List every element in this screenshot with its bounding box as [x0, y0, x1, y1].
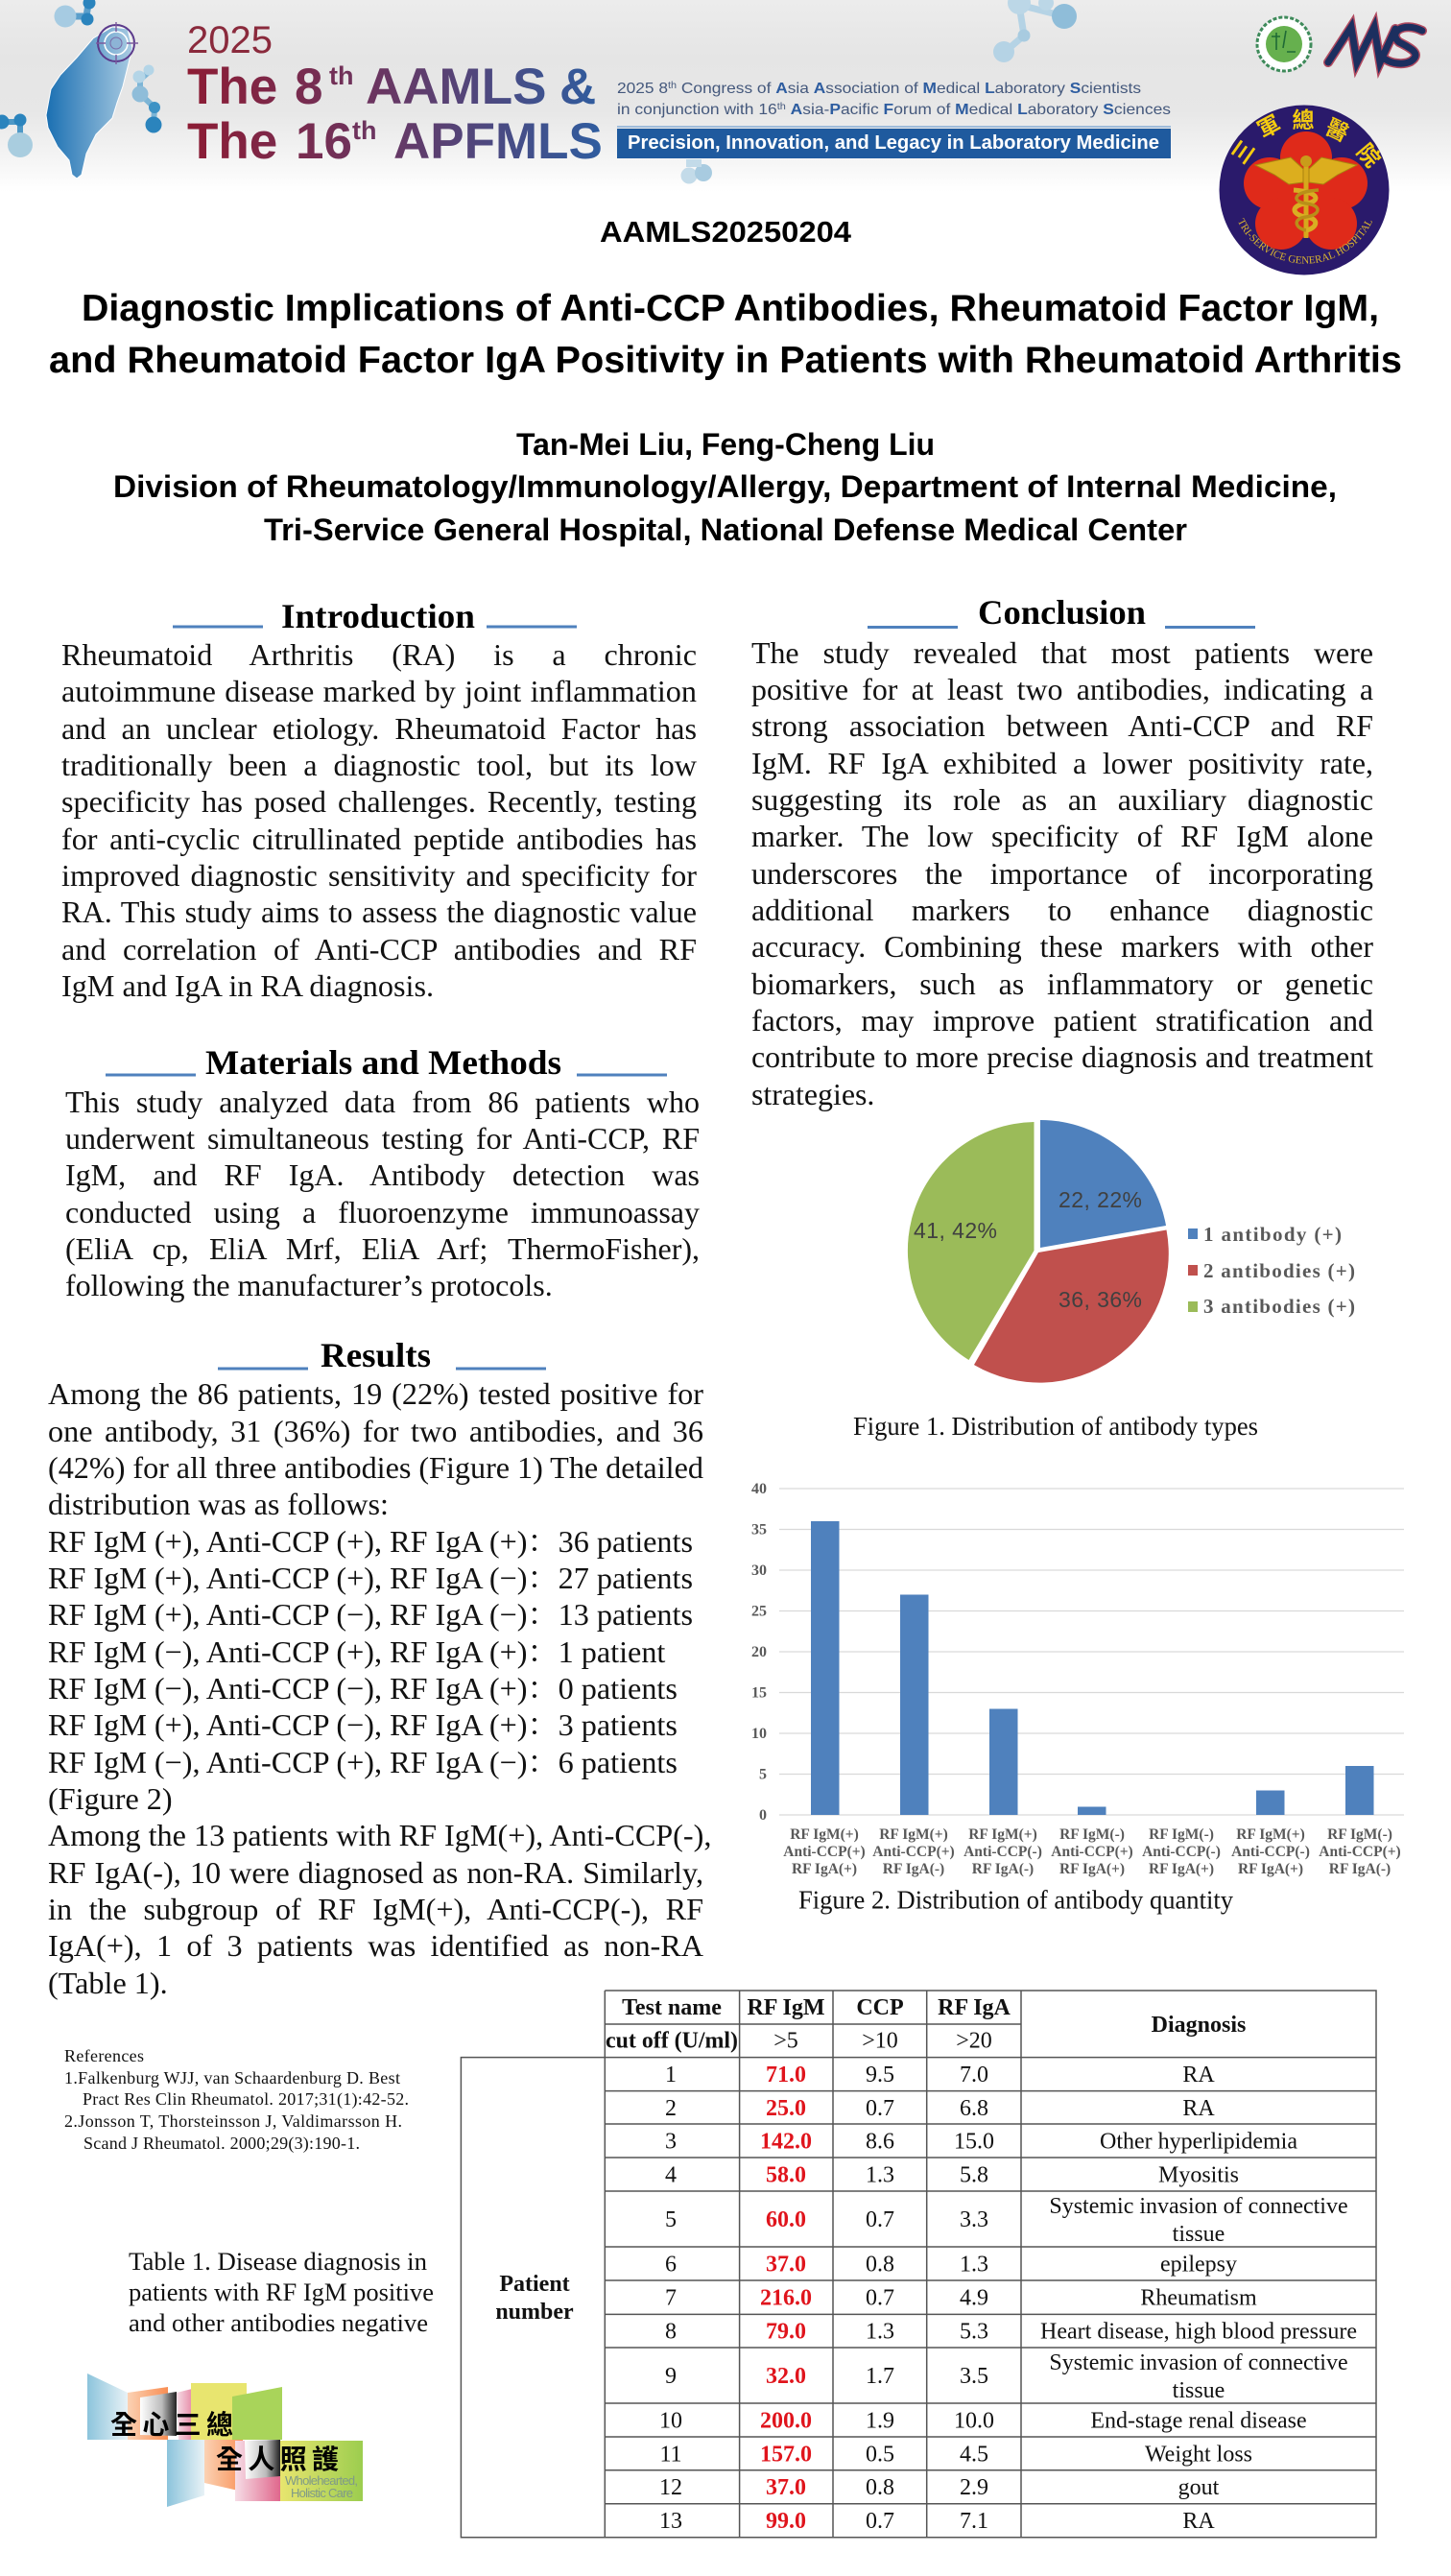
- row: patient 13: RA: [1182, 2509, 1215, 2534]
- conference name: [187, 59, 603, 170]
- category labels: Anti-CCP(+): [1051, 1844, 1133, 1860]
- row: patient 3: 142.0: [760, 2129, 812, 2154]
- text block: introduction: Rheumatoid Arthritis (RA) is a chronic: [61, 637, 697, 672]
- table header: [606, 1995, 1246, 2054]
- text block: materials and methods: conducted using a fluoroenzyme immunoassay: [65, 1195, 700, 1229]
- text block: materials and methods: underwent simultaneous testing for Anti-CCP, RF: [65, 1121, 700, 1156]
- icon: molecule left edge: [0, 113, 33, 157]
- row: patient 8: 8: [665, 2320, 677, 2345]
- caduceus: [1255, 155, 1357, 238]
- logo text: 全心三總: [110, 2410, 233, 2440]
- heading: Results: [218, 1336, 546, 1374]
- table header: cut off (U/ml): [606, 2029, 738, 2054]
- row: patient 3: 3: [665, 2129, 677, 2154]
- congress subtitle: th: [777, 102, 786, 112]
- table header: >10: [862, 2029, 898, 2054]
- row: patient 5: 3.3: [960, 2207, 988, 2232]
- row: patient 5: 5: [665, 2207, 677, 2232]
- hospital name in Chinese: [1226, 107, 1385, 172]
- row: patient 2: RA: [1182, 2096, 1215, 2121]
- table header: Diagnosis: [1152, 2013, 1246, 2038]
- congress subtitle: Congress of: [677, 81, 775, 97]
- row: patient 2: 25.0: [766, 2096, 806, 2121]
- congress subtitle: 2025 8: [617, 81, 664, 97]
- slogan bar: [617, 126, 1171, 158]
- text block: results: [48, 1376, 711, 2000]
- row: patient 11: [659, 2442, 1252, 2467]
- slice: 3 antibodies: [908, 1122, 1035, 1360]
- category labels: RF IgM(-): [1149, 1826, 1214, 1843]
- logo: wholehearted holistic care: Wholehearted,: [285, 2473, 358, 2488]
- icon: molecule top left: [54, 0, 96, 27]
- row: patient 2: 2: [665, 2096, 677, 2121]
- slice: 1 antibody: [1040, 1120, 1166, 1248]
- row: patient 4: 58.0: [766, 2163, 806, 2188]
- congress subtitle: th: [668, 81, 677, 91]
- table header: CCP: [856, 1995, 904, 2020]
- row: patient 4: Myositis: [1158, 2163, 1239, 2188]
- category labels: RF IgA(+): [1238, 1861, 1303, 1877]
- row: patient 10: [659, 2409, 1307, 2434]
- row: patient 10: 200.0: [760, 2409, 812, 2434]
- text block: introduction: and correlation of Anti-CCP antibodies and RF: [61, 932, 697, 966]
- text block: conclusion: underscores the importance of incorporating: [751, 857, 1373, 891]
- row: patient 6: 0.8: [866, 2252, 894, 2277]
- row: patient 8: [665, 2320, 1357, 2345]
- text block: conclusion: suggesting its role as an auxiliary diagnostic: [751, 783, 1373, 817]
- pie legend: 3 antibodies (+): [1203, 1295, 1355, 1318]
- category labels: Anti-CCP(+): [872, 1844, 955, 1860]
- row: patient 1: 7.0: [960, 2063, 988, 2087]
- grid lines and axis values: 0: [759, 1807, 767, 1824]
- bars: [811, 1521, 1374, 1815]
- row: patient 13: 13: [659, 2509, 682, 2534]
- text block: materials and methods: following the manufacturer’s protocols.: [65, 1268, 553, 1302]
- row: patient 13: [659, 2509, 1215, 2534]
- text block: conclusion: factors, may improve patient stratification and: [751, 1004, 1373, 1038]
- text block: introduction: improved diagnostic sensitivity and specificity for: [61, 858, 697, 893]
- row: patient 9: [665, 2350, 1348, 2403]
- hospital name in Chinese: 總: [1292, 107, 1315, 132]
- row: patient 2: 0.7: [866, 2096, 894, 2121]
- text block: results: RF IgM (+), Anti-CCP (−), RF IgA (−)：13 patients: [48, 1597, 693, 1632]
- row: patient 4: 5.8: [960, 2163, 988, 2188]
- heading: Introduction: [173, 597, 577, 635]
- text block: results: RF IgM (+), Anti-CCP (+), RF IgA (+)：36 patients: [48, 1524, 693, 1559]
- grid lines and axis values: 15: [751, 1685, 767, 1701]
- category labels: RF IgM(-): [1327, 1826, 1392, 1843]
- references: [64, 2046, 409, 2154]
- row: patient 3: 8.6: [866, 2129, 894, 2154]
- row: patient 9: tissue: [1173, 2378, 1225, 2403]
- slogan bar: Precision, Innovation, and Legacy in Laboratory Medicine: [628, 132, 1159, 154]
- text block: introduction: and an unclear etiology. Rheumatoid Factor has: [61, 711, 697, 746]
- row: patient 1: 9.5: [866, 2063, 894, 2087]
- category labels: RF IgA(-): [883, 1861, 944, 1877]
- logo: Tri-Service General Hospital: [1219, 106, 1390, 274]
- row: patient 9: 9: [665, 2364, 677, 2389]
- text block: introduction: IgM and IgA in RA diagnosis.: [61, 968, 434, 1003]
- category labels: [783, 1826, 1401, 1877]
- category labels: RF IgM(+): [968, 1826, 1037, 1843]
- caption: table 1: patients with RF IgM positive: [129, 2278, 434, 2306]
- row: patient 10: 10.0: [954, 2409, 994, 2434]
- row: patient 7: 216.0: [760, 2286, 812, 2311]
- logo: green association seal: [1257, 17, 1311, 71]
- text block: results: RF IgM (−), Anti-CCP (−), RF IgA (+)：0 patients: [48, 1671, 678, 1705]
- row label: patient number: Patient: [499, 2272, 570, 2297]
- conference name: The: [187, 59, 277, 115]
- row: patient 8: 79.0: [766, 2320, 806, 2345]
- text block: conclusion: IgM. RF IgA exhibited a lower positivity rate,: [751, 747, 1373, 780]
- references: Pract Res Clin Rheumatol. 2017;31(1):42-52.: [83, 2089, 409, 2110]
- conference name: th: [352, 116, 376, 145]
- references: Scand J Rheumatol. 2000;29(3):190-1.: [83, 2134, 360, 2154]
- row: patient 5: [665, 2194, 1348, 2247]
- conference name: AAMLS: [366, 59, 546, 115]
- heading: Materials and Methods: Materials and Methods: [205, 1043, 561, 1082]
- category labels: RF IgM(+): [1236, 1826, 1305, 1843]
- hospital name in English: TRI-SERVICE GENERAL HOSPITAL: [1238, 218, 1372, 264]
- heading: Results: Results: [321, 1336, 431, 1374]
- references: 1.Falkenburg WJJ, van Schaardenburg D. Best: [64, 2068, 400, 2087]
- row: patient 12: [659, 2475, 1220, 2500]
- category labels: RF IgA(-): [1329, 1861, 1391, 1877]
- text block: conclusion: biomarkers, such as inflammatory or genetic: [751, 967, 1373, 1001]
- grid lines and axis values: [751, 1481, 1404, 1824]
- grid lines and axis values: 40: [751, 1481, 767, 1497]
- heading: Conclusion: [868, 593, 1255, 632]
- authors and affiliation: Division of Rheumatology/Immunology/Allergy, Department of Internal Medicine,: [113, 469, 1337, 504]
- pie legend: 2 antibodies (+): [1203, 1259, 1355, 1282]
- row: patient 7: [665, 2286, 1257, 2311]
- row: patient 4: [665, 2163, 1239, 2188]
- row: patient 9: 32.0: [766, 2364, 806, 2389]
- table grid: [461, 1991, 1376, 2538]
- logo: wholehearted holistic care: Holistic Care: [291, 2486, 353, 2500]
- congress subtitle: Asia Association of Medical Laboratory Scientists: [775, 81, 1136, 97]
- caption: table 1: Table 1. Disease diagnosis in: [129, 2248, 427, 2276]
- row: patient 1: 71.0: [766, 2063, 806, 2087]
- caption: figure 1: Figure 1. Distribution of antibody types: [853, 1412, 1258, 1441]
- row: patient 12: gout: [1178, 2475, 1220, 2500]
- row: patient 8: Heart disease, high blood pressure: [1040, 2320, 1357, 2345]
- caption: figure 2: Figure 2. Distribution of antibody quantity: [798, 1885, 1233, 1914]
- category labels: Anti-CCP(+): [1319, 1844, 1401, 1860]
- text block: results: in the subgroup of RF IgM(+), Anti-CCP(-), RF: [48, 1892, 703, 1926]
- row: patient 12: 37.0: [766, 2475, 806, 2500]
- row: patient 12: 2.9: [960, 2475, 988, 2500]
- row: patient 12: 12: [659, 2475, 682, 2500]
- category labels: RF IgA(+): [792, 1861, 857, 1877]
- row: patient 7: 0.7: [866, 2286, 894, 2311]
- row: patient 1: 1: [665, 2063, 677, 2087]
- row: patient 11: 157.0: [760, 2442, 812, 2467]
- category labels: RF IgA(+): [1059, 1861, 1125, 1877]
- row: patient 13: 99.0: [766, 2509, 806, 2534]
- logo: association monogram: [1328, 27, 1422, 63]
- icon: molecule centre top: [993, 0, 1077, 62]
- row: patient 7: 7: [665, 2286, 677, 2311]
- text block: conclusion: strategies.: [751, 1078, 874, 1111]
- logo: wholehearted holistic care: [87, 2373, 363, 2507]
- category labels: Anti-CCP(-): [1231, 1844, 1310, 1860]
- row: patient 9: 1.7: [866, 2364, 894, 2389]
- congress subtitle: Asia-Pacific Forum of Medical Laboratory Sciences: [791, 102, 1166, 118]
- row: patient 12: 0.8: [866, 2475, 894, 2500]
- row: patient 6: 37.0: [766, 2252, 806, 2277]
- text block: conclusion: marker. The low specificity of RF IgM alone: [751, 820, 1373, 853]
- row: patient 11: 11: [659, 2442, 682, 2467]
- logo panels: [87, 2373, 363, 2507]
- hospital name in Chinese: 醫: [1321, 114, 1352, 146]
- icon: Taiwan map: [46, 27, 132, 179]
- text block: introduction: RA. This study aims to assess the diagnostic value: [61, 894, 697, 929]
- slice: 2 antibodies: [974, 1230, 1169, 1383]
- row: patient 4: 1.3: [866, 2163, 894, 2188]
- text block: introduction: specificity has posed challenges. Recently, testing: [61, 784, 697, 819]
- row: patient 6: epilepsy: [1160, 2252, 1237, 2277]
- logo text: [110, 2410, 339, 2474]
- text block: results: (Table 1).: [48, 1966, 168, 2000]
- text block: results: RF IgA(-), 10 were diagnosed as non-RA. Similarly,: [48, 1855, 703, 1890]
- title: and Rheumatoid Factor IgA Positivity in Patients with Rheumatoid Arthritis: [49, 340, 1402, 381]
- text block: results: RF IgM (+), Anti-CCP (+), RF IgA (−)：27 patients: [48, 1561, 693, 1595]
- icon: molecule right of map: [132, 65, 161, 132]
- row label: patient number: number: [495, 2300, 574, 2325]
- conference banner: [0, 0, 1451, 192]
- text block: conclusion: additional markers to enhance diagnostic: [751, 894, 1373, 927]
- row: patient 13: 7.1: [960, 2509, 988, 2534]
- category labels: RF IgA(-): [972, 1861, 1034, 1877]
- table header: >5: [773, 2029, 798, 2054]
- text block: results: RF IgM (+), Anti-CCP (−), RF IgA (+)：3 patients: [48, 1707, 678, 1742]
- grid lines and axis values: 30: [751, 1562, 767, 1579]
- text block: conclusion: accuracy. Combining these markers with other: [751, 930, 1373, 964]
- row: patient 7: 4.9: [960, 2286, 988, 2311]
- title: Diagnostic Implications of Anti-CCP Antibodies, Rheumatoid Factor IgM,: [82, 288, 1379, 329]
- conference name: 16: [296, 113, 352, 170]
- text block: results: (Figure 2): [48, 1781, 173, 1816]
- plum blossom: [1244, 131, 1368, 250]
- authors and affiliation: Tri-Service General Hospital, National Defense Medical Center: [264, 513, 1187, 547]
- row: patient 10: 10: [659, 2409, 682, 2434]
- row: patient 9: 3.5: [960, 2364, 988, 2389]
- text block: conclusion: strong association between Anti-CCP and RF: [751, 709, 1373, 743]
- table header: RF IgA: [938, 1995, 1011, 2020]
- row: patient 13: 0.7: [866, 2509, 894, 2534]
- category labels: RF IgA(+): [1149, 1861, 1214, 1877]
- abstract number: AAMLS20250204: [600, 215, 852, 249]
- row label: patient number: [495, 2272, 574, 2325]
- pie chart: distribution of antibody types: [908, 1120, 1355, 1383]
- authors and affiliation: Tan-Mei Liu, Feng-Cheng Liu: [516, 427, 935, 462]
- row: patient 2: [665, 2096, 1215, 2121]
- text block: conclusion: positive for at least two antibodies, indicating a: [751, 673, 1373, 706]
- row: patient 3: Other hyperlipidemia: [1100, 2129, 1297, 2154]
- table header: Test name: [622, 1995, 722, 2020]
- grid lines and axis values: 35: [751, 1522, 767, 1538]
- row: patient 10: 1.9: [866, 2409, 894, 2434]
- text block: results: distribution was as follows:: [48, 1487, 389, 1521]
- pie legend: 1 antibody (+): [1203, 1223, 1342, 1246]
- text block: results: one antibody, 31 (36%) for two antibodies, and 36: [48, 1414, 703, 1448]
- text block: results: RF IgM (−), Anti-CCP (+), RF IgA (+)：1 patient: [48, 1634, 665, 1669]
- row: patient 11: 0.5: [866, 2442, 894, 2467]
- pie labels: 36, 36%: [1059, 1287, 1142, 1312]
- row: patient 5: 0.7: [866, 2207, 894, 2232]
- icon: location target on map: [96, 22, 138, 64]
- category labels: RF IgM(+): [879, 1826, 948, 1843]
- text block: results: Among the 86 patients, 19 (22%) tested positive for: [48, 1376, 703, 1411]
- row: patient 5: 60.0: [766, 2207, 806, 2232]
- conference name: 8: [295, 59, 322, 115]
- row: patient 6: 6: [665, 2252, 677, 2277]
- text block: conclusion: contribute to more precise diagnosis and treatment: [751, 1040, 1373, 1074]
- row: patient 2: 6.8: [960, 2096, 988, 2121]
- table 1: patient diagnoses: [461, 1991, 1376, 2538]
- hospital name in Chinese: 三: [1226, 136, 1260, 168]
- text block: materials and methods: [65, 1085, 700, 1302]
- icon: molecule below slogan: [681, 159, 712, 184]
- logo text: 全人照護: [216, 2445, 339, 2474]
- row: patient 6: [665, 2252, 1237, 2277]
- heading: Conclusion: Conclusion: [978, 593, 1146, 632]
- grid lines and axis values: 5: [759, 1766, 767, 1783]
- conference name: APFMLS: [393, 113, 603, 170]
- row: patient 1: [665, 2063, 1215, 2087]
- text block: conclusion: The study revealed that most patients were: [751, 636, 1373, 670]
- row: patient 9: Systemic invasion of connective: [1049, 2350, 1348, 2375]
- pie labels: 22, 22%: [1059, 1187, 1142, 1212]
- row: patient 6: 1.3: [960, 2252, 988, 2277]
- category labels: Anti-CCP(-): [963, 1844, 1042, 1860]
- heading: Materials and Methods: [106, 1043, 667, 1082]
- text block: materials and methods: IgM, and RF IgA. Antibody detection was: [65, 1157, 700, 1192]
- text block: introduction: autoimmune disease marked by joint inflammation: [61, 674, 697, 708]
- category labels: Anti-CCP(-): [1142, 1844, 1221, 1860]
- pie labels: [914, 1187, 1142, 1312]
- references: References: [64, 2046, 144, 2065]
- row: patient 8: 1.3: [866, 2320, 894, 2345]
- text block: results: IgA(+), 1 of 3 patients was identified as non-RA: [48, 1928, 703, 1963]
- text block: introduction: [61, 637, 697, 1003]
- text block: materials and methods: (EliA cp, EliA Mrf, EliA Arf; ThermoFisher),: [65, 1231, 700, 1266]
- row: patient 8: 5.3: [960, 2320, 988, 2345]
- pie legend: [1188, 1223, 1355, 1318]
- conference name: The: [187, 113, 277, 170]
- text block: introduction: for anti-cyclic citrullinated peptide antibodies has: [61, 822, 697, 856]
- row: patient 10: End-stage renal disease: [1090, 2409, 1307, 2434]
- bar chart: distribution of antibody quantity: [751, 1481, 1404, 1877]
- category labels: RF IgM(+): [790, 1826, 859, 1843]
- row: patient 11: 4.5: [960, 2442, 988, 2467]
- heading: Introduction: Introduction: [281, 597, 475, 635]
- conference year: 2025: [187, 19, 273, 61]
- table header: >20: [956, 2029, 992, 2054]
- grid lines and axis values: 10: [751, 1726, 767, 1742]
- pie labels: 41, 42%: [914, 1218, 997, 1243]
- authors and affiliation: [113, 427, 1337, 547]
- conference name: &: [559, 59, 596, 115]
- conference name: th: [329, 61, 353, 90]
- hospital name in Chinese: 軍: [1253, 110, 1285, 143]
- grid lines and axis values: 20: [751, 1644, 767, 1660]
- category labels: RF IgM(-): [1059, 1826, 1125, 1843]
- grid lines and axis values: 25: [751, 1603, 767, 1620]
- text block: materials and methods: This study analyzed data from 86 patients who: [65, 1085, 700, 1119]
- congress subtitle: in conjunction with 16: [617, 102, 764, 118]
- text block: conclusion: [751, 636, 1373, 1111]
- row: patient 3: 15.0: [954, 2129, 994, 2154]
- text block: results: RF IgM (−), Anti-CCP (+), RF IgA (−)：6 patients: [48, 1745, 678, 1779]
- hospital name in Chinese: 院: [1352, 139, 1385, 172]
- category labels: Anti-CCP(+): [783, 1844, 866, 1860]
- text block: introduction: traditionally been a diagnostic tool, but its low: [61, 748, 697, 782]
- row: patient 4: 4: [665, 2163, 677, 2188]
- table header: RF IgM: [747, 1995, 825, 2020]
- row: patient 3: [665, 2129, 1297, 2154]
- row: patient 7: Rheumatism: [1140, 2286, 1257, 2311]
- text block: results: (42%) for all three antibodies (Figure 1) The detailed: [48, 1450, 703, 1485]
- caption: table 1: and other antibodies negative: [129, 2309, 428, 2337]
- text block: results: Among the 13 patients with RF IgM(+), Anti-CCP(-),: [48, 1818, 711, 1852]
- congress subtitle: [617, 81, 1171, 118]
- caption: table 1: [129, 2248, 434, 2337]
- row: patient 5: Systemic invasion of connective: [1049, 2194, 1348, 2219]
- title: [49, 288, 1402, 381]
- references: 2.Jonsson T, Thorsteinsson J, Valdimarsson H.: [64, 2111, 402, 2131]
- row: patient 11: Weight loss: [1145, 2442, 1252, 2467]
- row: patient 1: RA: [1182, 2063, 1215, 2087]
- row: patient 5: tissue: [1173, 2222, 1225, 2247]
